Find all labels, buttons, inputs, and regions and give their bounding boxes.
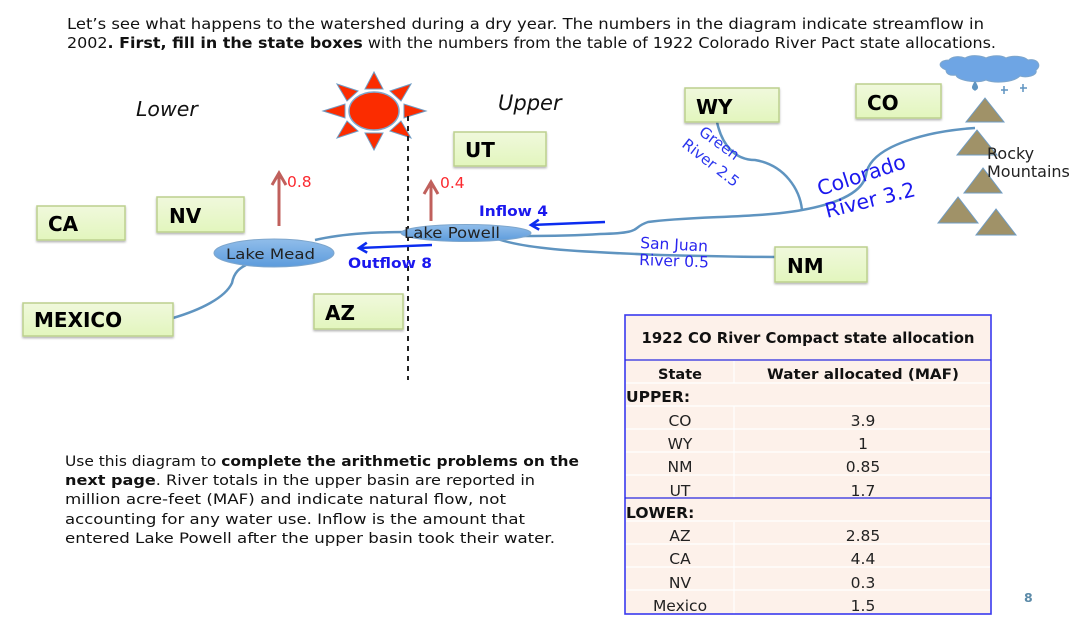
state box: NM: NM	[787, 254, 824, 278]
state box: NV	[157, 197, 244, 232]
inflow label and arrow: Inflow 4	[479, 204, 548, 220]
lower basin rows: 1.5	[851, 597, 875, 615]
state box: WY: WY	[696, 95, 733, 119]
state box: WY	[685, 88, 779, 122]
icon: rain cloud	[940, 56, 1039, 94]
heading: Upper basin: Upper	[498, 91, 563, 115]
label: San Juan River: River 0.5	[639, 251, 709, 271]
upper basin rows: 3.9	[851, 412, 875, 430]
label: Colorado River: River 3.2	[822, 177, 918, 223]
lower basin rows: AZ	[669, 527, 691, 545]
table header: Water allocated (MAF)	[767, 367, 959, 383]
table: 1922 state allocations	[625, 315, 991, 615]
state box: AZ: AZ	[325, 301, 355, 325]
icon: sun	[323, 72, 426, 150]
lower basin rows: LOWER:	[626, 504, 694, 522]
upper basin rows: NM	[668, 458, 692, 476]
body text: next page . River totals in the upper basin are reported in	[65, 473, 535, 489]
rivers	[173, 122, 975, 318]
intro text: 2002. First, fill in the state boxes with the numbers from the table of 1922 Colorado River Pact state allocations.	[67, 34, 996, 52]
state box: MEXICO	[23, 303, 173, 336]
page number: 8	[1024, 590, 1033, 605]
lower basin rows: 2.85	[846, 527, 880, 545]
upper basin rows: WY	[668, 435, 693, 453]
lake: Mead	[214, 239, 334, 267]
lake: Powell: Lake Powell	[404, 224, 500, 242]
table header: State	[658, 367, 702, 383]
table header	[658, 367, 959, 383]
icon: Rocky Mountains triangles	[938, 98, 1016, 235]
basin divider line	[407, 116, 409, 380]
label: San Juan River: San Juan	[640, 234, 708, 256]
lower basin rows	[626, 504, 880, 615]
upper basin rows: CO	[668, 412, 692, 430]
label: Green River: River 2.5	[679, 135, 743, 191]
upper basin rows: 0.85	[846, 458, 880, 476]
upper basin rows: UT	[670, 482, 691, 500]
intro text	[67, 15, 996, 52]
lower basin rows: CA	[669, 550, 691, 568]
table title: 1922 CO River Compact state allocation	[642, 329, 974, 347]
river: Green	[717, 122, 802, 210]
lake: Powell	[401, 224, 531, 242]
river: Mead to Mexico	[173, 265, 246, 318]
lower basin rows: 0.3	[851, 574, 875, 592]
state box: CA	[37, 206, 125, 240]
body text: accounting for any water use. Inflow is the amount that	[65, 512, 525, 528]
state box: NV: NV	[169, 204, 202, 228]
body text: million acre-feet (MAF) and indicate natural flow, not	[65, 492, 506, 508]
river: Powell to Mead	[315, 232, 410, 240]
evaporation arrow 0.4: 0.4	[440, 174, 465, 192]
heading: Lower basin: Lower	[136, 97, 199, 121]
state box: UT: UT	[465, 138, 495, 162]
outflow label and arrow	[348, 245, 432, 272]
state box: MEXICO: MEXICO	[34, 308, 122, 332]
label: San Juan River	[639, 234, 709, 271]
lower basin rows: NV	[669, 574, 691, 592]
label: Colorado River	[814, 150, 918, 223]
upper basin rows: 1.7	[851, 482, 875, 500]
upper basin rows: 1	[858, 435, 868, 453]
label: Rocky Mountains: Rocky	[987, 144, 1034, 163]
upper basin rows	[626, 388, 880, 500]
body text	[65, 454, 579, 547]
state box: AZ	[314, 294, 403, 329]
river: San Juan	[490, 236, 778, 257]
state box: CO	[856, 84, 941, 118]
state box: CO: CO	[867, 91, 899, 115]
state box: NM	[775, 247, 867, 282]
body text: entered Lake Powell after the upper basin took their water.	[65, 531, 555, 547]
label: Green River: Green	[696, 123, 743, 164]
label: Rocky Mountains: Mountains	[987, 162, 1070, 181]
outflow label and arrow: Outflow 8	[348, 256, 432, 272]
intro text: Let’s see what happens to the watershed during a dry year. The numbers in the diagram indicate streamflow in	[67, 15, 984, 33]
label: Colorado River: Colorado	[814, 150, 909, 201]
label: Rocky Mountains	[988, 147, 1070, 177]
evaporation arrow 0.8: 0.8	[287, 173, 312, 191]
state box: CA: CA	[48, 212, 79, 236]
lower basin rows: Mexico	[653, 597, 707, 615]
river: Colorado	[520, 128, 975, 236]
lower basin rows: 4.4	[851, 550, 875, 568]
state box: UT	[454, 132, 546, 166]
lake: Mead: Lake Mead	[226, 247, 315, 263]
inflow label and arrow	[479, 204, 605, 225]
evaporation arrow 0.4	[424, 174, 465, 221]
upper basin rows: UPPER:	[626, 388, 690, 406]
evaporation arrow 0.8	[272, 173, 312, 226]
body text: Use this diagram to complete the arithmetic problems on the	[65, 454, 579, 470]
